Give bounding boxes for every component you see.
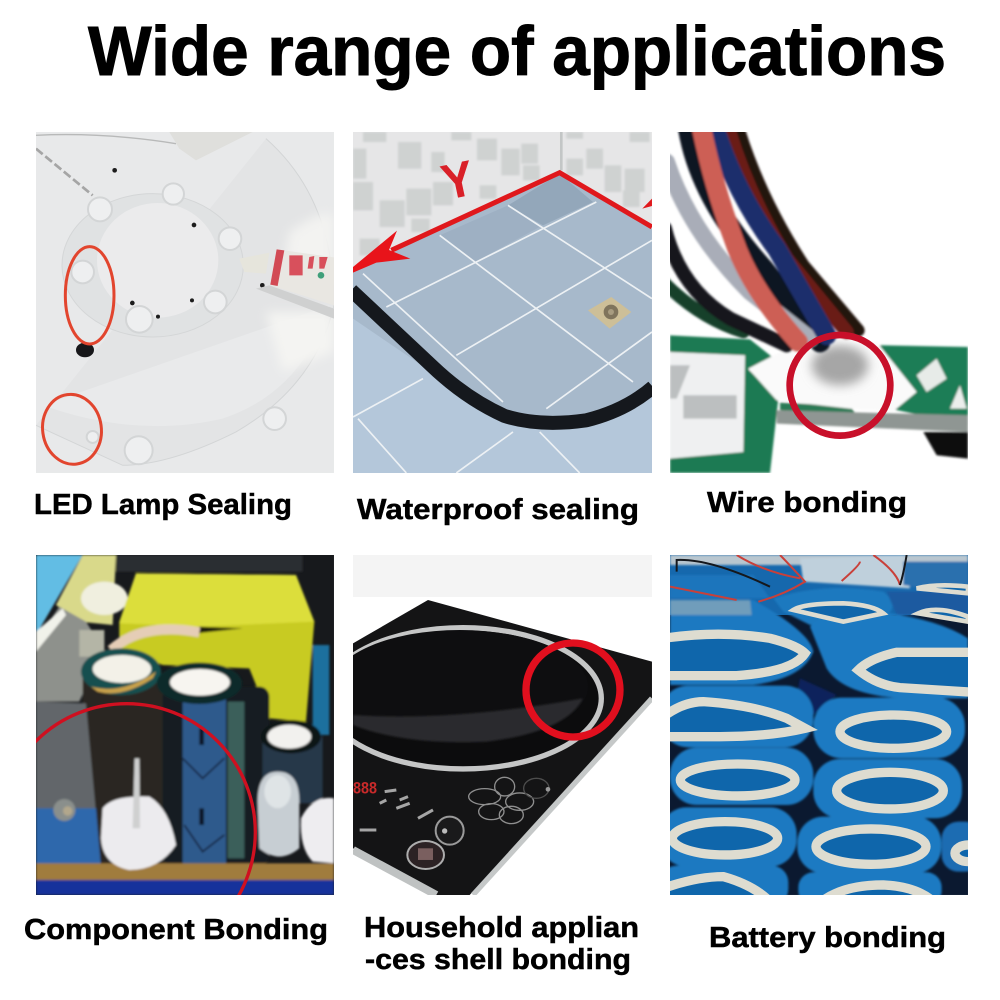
panel: LED lamp sealing bbox=[36, 132, 334, 473]
battery leads bbox=[670, 555, 907, 602]
title: Wide range of applications bbox=[88, 12, 946, 90]
floor tiles bbox=[353, 180, 652, 428]
capacitor bodies bbox=[83, 678, 169, 865]
panel: battery bonding bbox=[670, 555, 968, 895]
caption: battery bonding: Battery bonding bbox=[709, 922, 946, 954]
icon: flower pattern bbox=[469, 777, 549, 824]
white adhesive bbox=[101, 796, 176, 870]
icon: small holes bbox=[112, 168, 265, 319]
caption: waterproof sealing: Waterproof sealing bbox=[357, 494, 639, 526]
white adhesive rims bbox=[663, 585, 982, 902]
panel: component bonding bbox=[36, 555, 334, 895]
caption: LED lamp sealing: LED Lamp Sealing bbox=[34, 489, 292, 521]
red circle bbox=[36, 702, 257, 895]
icon: floor drain bbox=[588, 297, 631, 329]
red circle bbox=[790, 335, 890, 436]
yellow transformer bbox=[119, 573, 314, 722]
icon: mounting hole bbox=[76, 343, 94, 357]
PCB bbox=[36, 863, 334, 880]
green circuit board bbox=[670, 335, 968, 473]
panel: household appliances bbox=[325, 555, 652, 895]
lamp ring bbox=[62, 194, 243, 337]
control buttons bbox=[360, 787, 550, 869]
red circle bbox=[526, 643, 620, 737]
panel: wire bonding bbox=[663, 129, 968, 473]
control display: 888 bbox=[353, 778, 377, 797]
clear LED bbox=[258, 772, 299, 857]
red circles bbox=[65, 247, 114, 344]
capacitor tops bbox=[81, 648, 161, 695]
black sealing strip bbox=[351, 290, 653, 423]
icon: glue tube bbox=[239, 249, 334, 319]
white connector bbox=[670, 352, 745, 459]
adhesive blob bbox=[812, 345, 868, 385]
label: axis marker, cut off bbox=[642, 199, 652, 209]
caption: household appliances, two lines: Household applian bbox=[364, 912, 639, 944]
caption: wire bonding: Wire bonding bbox=[707, 487, 907, 519]
printed label line bbox=[36, 149, 93, 195]
caption: household appliances, two lines: -ces shell bonding bbox=[365, 944, 631, 976]
label: axis Y: Y bbox=[436, 150, 479, 211]
panel: waterproof sealing bbox=[351, 132, 653, 473]
icon: LED beads bbox=[71, 183, 286, 464]
induction cooker body bbox=[353, 600, 652, 895]
wall tiles bbox=[353, 132, 650, 255]
red corner line with arrow bbox=[353, 173, 652, 273]
caption: component bonding: Component Bonding bbox=[24, 914, 328, 946]
grey-blue block bbox=[36, 700, 97, 810]
cooktop ring bbox=[325, 628, 601, 769]
wire bundle bbox=[663, 129, 858, 345]
caption: household appliances, two lines bbox=[364, 912, 639, 976]
